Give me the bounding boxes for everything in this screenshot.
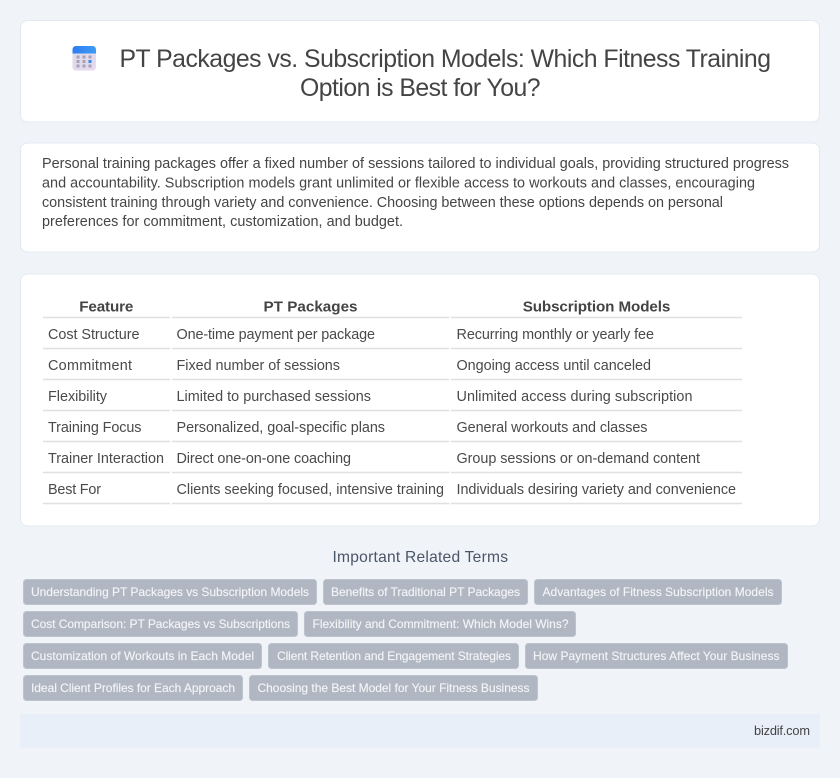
text block: introduction paragraph: and accountability. Subscription models grant unlimited or flexible access to workouts and classes, encouraging [42, 176, 755, 192]
tag [324, 580, 528, 604]
row: best for: Individuals desiring variety and convenience [456, 482, 736, 498]
icon: calendar [72, 46, 96, 70]
text block: introduction paragraph [42, 156, 789, 230]
tag [304, 612, 576, 636]
row: commitment: Fixed number of sessions [176, 358, 340, 374]
tag: Understanding PT Packages vs Subscription Models [31, 585, 309, 599]
tag [250, 676, 538, 700]
tag [526, 644, 788, 668]
tag: Choosing the Best Model for Your Fitness Business [258, 681, 530, 695]
tag list: related terms [24, 580, 788, 700]
tag [534, 580, 782, 604]
title: Option is Best for You? [300, 75, 540, 102]
footer: bizdif.com [754, 723, 810, 738]
row: trainer interaction [48, 451, 700, 467]
table header row [79, 298, 670, 316]
row: cost structure: Cost Structure [48, 327, 140, 343]
tag: How Payment Structures Affect Your Business [533, 649, 780, 663]
tag [24, 644, 262, 668]
footer [20, 714, 820, 748]
text block: introduction paragraph: Personal training packages offer a fixed number of sessions tailored to individual goals, providing structured progress [42, 156, 789, 172]
row: trainer interaction: Trainer Interaction [48, 451, 164, 467]
row: trainer interaction: Group sessions or on-demand content [456, 451, 700, 467]
row: trainer interaction: Direct one-on-one coaching [176, 451, 351, 467]
tag [268, 644, 518, 668]
tag: Cost Comparison: PT Packages vs Subscriptions [31, 617, 290, 631]
tag: Customization of Workouts in Each Model [31, 649, 254, 663]
row: flexibility: Limited to purchased sessions [176, 389, 371, 405]
row: training focus: General workouts and classes [456, 420, 648, 436]
row: cost structure: Recurring monthly or yearly fee [456, 327, 654, 343]
row: training focus [48, 420, 648, 436]
panel: comparison table [20, 274, 820, 526]
text block: introduction paragraph: preferences for commitment, customization, and budget. [42, 214, 403, 230]
tag [24, 612, 298, 636]
table header row: Subscription Models [523, 298, 670, 316]
tag [24, 580, 316, 604]
tag [24, 676, 242, 700]
tag: Benefits of Traditional PT Packages [331, 585, 520, 599]
row: commitment: Commitment [48, 358, 132, 374]
tag: Advantages of Fitness Subscription Models [542, 585, 774, 599]
panel: header [20, 20, 820, 122]
row: best for [48, 482, 736, 498]
text block: introduction paragraph: consistent training through variety and convenience. Choosing between these options depends on personal [42, 195, 723, 211]
table header row: PT Packages [264, 298, 358, 316]
row: training focus: Personalized, goal-specific plans [176, 420, 385, 436]
row: commitment: Ongoing access until canceled [456, 358, 651, 374]
tag: Ideal Client Profiles for Each Approach [31, 681, 235, 695]
heading: important related terms: Important Related Terms [332, 549, 508, 566]
title: PT Packages vs. Subscription Models: Which Fitness Training [120, 46, 771, 73]
row: flexibility [48, 389, 692, 405]
row: best for: Clients seeking focused, intensive training [176, 482, 444, 498]
row: flexibility: Flexibility [48, 389, 108, 405]
tag: Client Retention and Engagement Strategies [277, 649, 511, 663]
row: training focus: Training Focus [48, 420, 142, 436]
title [120, 46, 771, 102]
row: cost structure: One-time payment per package [176, 327, 375, 343]
panel: introduction [20, 143, 820, 252]
tag: Flexibility and Commitment: Which Model Wins? [312, 617, 569, 631]
table header row: Feature [79, 298, 133, 316]
row: best for: Best For [48, 482, 101, 498]
row: flexibility: Unlimited access during subscription [456, 389, 692, 405]
row: commitment [48, 358, 651, 374]
row: cost structure [48, 327, 654, 343]
